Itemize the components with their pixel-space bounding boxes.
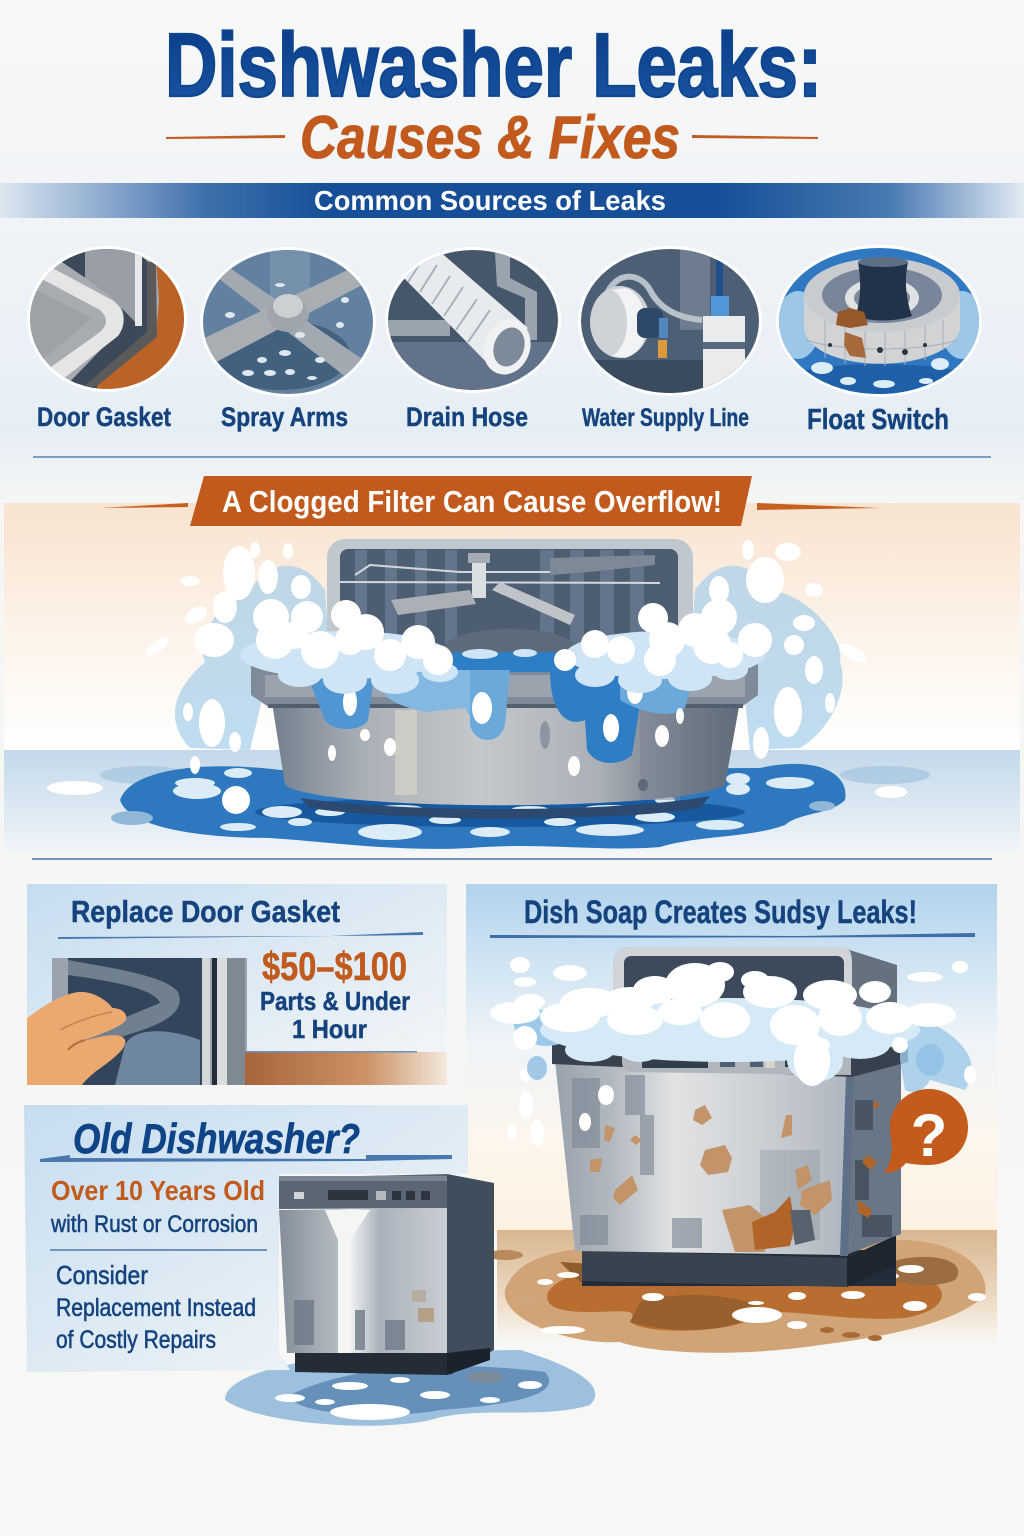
cost and time: Parts & Under	[260, 986, 410, 1016]
icon: spray arms	[200, 245, 376, 400]
age warning	[50, 1175, 267, 1251]
icon: drain hose	[385, 245, 561, 395]
overflow callout banner	[100, 476, 880, 526]
replacement advice: Replacement Instead	[56, 1294, 256, 1322]
heading: Dish Soap Creates Sudsy Leaks!	[524, 894, 917, 930]
cost and time: 1 Hour	[292, 1014, 367, 1044]
brown puddle	[487, 1240, 986, 1353]
dishwasher back frame	[327, 539, 693, 699]
icon: float switch	[776, 245, 984, 400]
icon: door gasket	[27, 246, 187, 392]
label: door gasket: Door Gasket	[37, 402, 171, 432]
heading: Old Dishwasher?	[73, 1115, 360, 1162]
cost and time: $50–$100	[262, 945, 407, 989]
title: Dishwasher Leaks:	[165, 16, 822, 116]
old dishwasher illustration	[279, 1174, 494, 1375]
subtitle with side rules: Causes & Fixes	[300, 104, 680, 171]
label: drain hose: Drain Hose	[406, 402, 528, 432]
panel: common leak sources	[20, 240, 984, 436]
panel: dish soap sudsy leaks	[466, 884, 997, 1353]
splashing water	[143, 540, 870, 774]
replacement advice: Consider	[56, 1260, 148, 1290]
blue puddle under old dishwasher	[225, 1350, 595, 1426]
replacement advice: of Costly Repairs	[56, 1326, 216, 1354]
section banner: common sources: Common Sources of Leaks	[314, 185, 666, 216]
icon: water supply line	[578, 245, 762, 400]
panel: overflow illustration	[4, 503, 1020, 852]
icon: question speech bubble	[884, 1089, 968, 1173]
overflow callout banner: A Clogged Filter Can Cause Overflow!	[222, 484, 722, 519]
foam	[240, 599, 772, 694]
rusty dishwasher	[552, 947, 908, 1287]
icon: question speech bubble: ?	[911, 1102, 947, 1169]
replacement advice	[56, 1260, 256, 1354]
age warning: with Rust or Corrosion	[50, 1211, 258, 1238]
age warning: Over 10 Years Old	[51, 1175, 265, 1206]
section banner: common sources	[0, 183, 1024, 218]
subtitle with side rules	[166, 104, 818, 171]
label: float switch: Float Switch	[807, 404, 949, 436]
label: water supply line: Water Supply Line	[582, 404, 749, 432]
gasket photo illustration	[27, 958, 447, 1085]
panel: replace door gasket	[27, 884, 447, 1085]
panel: old dishwasher	[24, 1105, 494, 1375]
cost and time	[245, 945, 417, 1052]
heading: Replace Door Gasket	[71, 894, 340, 929]
label: spray arms: Spray Arms	[221, 402, 348, 432]
suds	[490, 957, 976, 1146]
puddle	[47, 764, 930, 849]
overflowing tub	[251, 652, 758, 818]
